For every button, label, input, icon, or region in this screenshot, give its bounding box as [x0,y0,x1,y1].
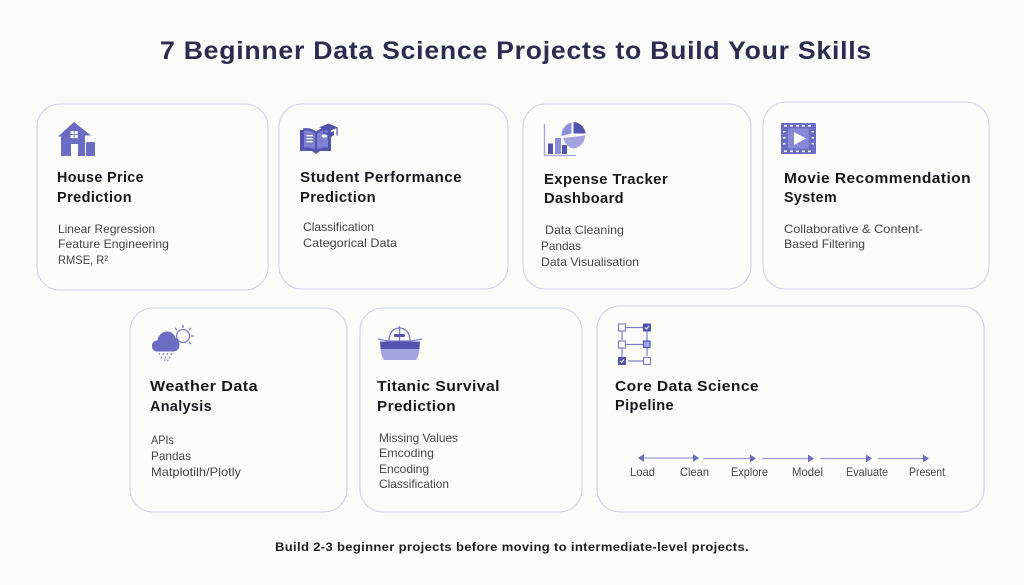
topics: Linear Regression [58,222,155,236]
icon: bars and pie chart [544,122,586,156]
heading: Expense Tracker [544,171,668,188]
topics [303,220,397,250]
panel: Expense Tracker Dashboard [523,104,751,289]
heading: Movie Recommendation [784,170,971,187]
panel: Movie Recommendation System: System [784,189,837,206]
topics: APIs [151,433,174,447]
panel: Movie Recommendation System [763,102,989,289]
panel: Core Data Science Pipeline [597,306,984,512]
icon: ship [378,326,422,360]
pipeline labels: Clean [680,465,709,479]
panel: Core Data Science Pipeline: Pipeline [615,397,674,414]
panel: Titanic Survival Prediction: Prediction [377,398,456,415]
heading: Titanic Survival [377,378,500,395]
topics: Classification [303,220,374,234]
heading: Weather Data [150,378,258,395]
topics [58,222,169,267]
topics: Collaborative & Content- [784,222,923,236]
panel: Titanic Survival Prediction [360,308,582,512]
pipeline labels: Present [909,465,946,479]
topics: Matplotilh/Plotly [151,465,241,479]
topics: Missing Values [379,431,458,445]
heading: Student Performance [300,169,462,186]
pipeline labels [630,465,946,479]
topics: Feature Engineering [58,237,169,251]
pipeline arrows [638,454,929,462]
icon: film with play button [781,123,816,154]
footer note: Build 2-3 beginner projects before moving to intermediate-level projects. [275,542,749,554]
icon: checklist flow [618,324,651,365]
panel: House Price Prediction [37,104,268,290]
icon: house [58,122,95,156]
pipeline labels: Model [792,465,823,479]
icon: book with graduation cap [300,124,338,154]
topics: Based Filtering [784,237,865,251]
topics [541,223,639,269]
panel: Expense Tracker Dashboard: Dashboard [544,190,624,207]
pipeline labels: Load [630,465,655,479]
topics [784,222,923,251]
topics: Classification [379,477,449,491]
topics: Encoding [379,462,429,476]
topics: Categorical Data [303,236,397,250]
topics: Pandas [541,239,581,253]
pipeline labels: Evaluate [846,465,888,479]
title: 7 Beginner Data Science Projects to Build Your Skills [160,37,872,65]
heading: House Price [57,169,144,186]
panel: House Price Prediction: Prediction [57,189,132,206]
panel: Student Performance Prediction [279,104,508,289]
topics: RMSE, R² [58,253,108,267]
topics [151,433,241,479]
icon: cloud, sun and rain [152,325,194,361]
topics: Data Visualisation [541,255,639,269]
panel: Weather Data Analysis [130,308,347,512]
topics: Emcoding [379,446,434,460]
panel: Weather Data Analysis: Analysis [150,398,212,415]
panel: Student Performance Prediction: Prediction [300,189,376,206]
heading: Core Data Science [615,378,759,395]
topics [379,431,458,491]
topics: Pandas [151,449,191,463]
pipeline labels: Explore [731,465,768,479]
topics: Data Cleaning [545,223,624,237]
